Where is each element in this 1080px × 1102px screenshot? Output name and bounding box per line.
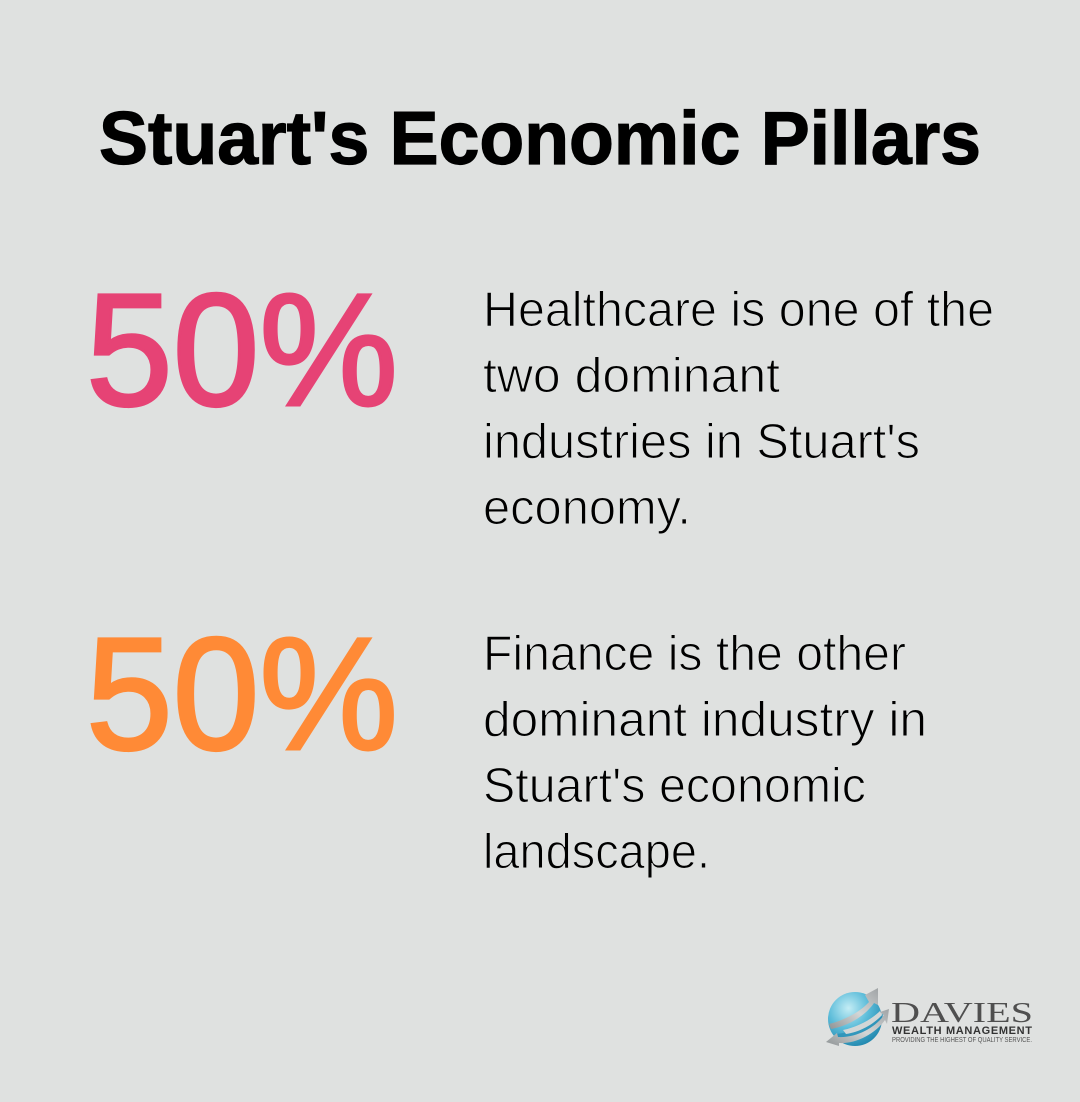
panel: finance stat: [86, 604, 927, 879]
logo tagline: PROVIDING THE HIGHEST OF QUALITY SERVICE.: [892, 1037, 1032, 1044]
logo: Davies Wealth Management: [826, 988, 1033, 1046]
stat: healthcare 50%: 50%: [86, 260, 398, 439]
logo wordmark: DAVIES: [891, 997, 1033, 1029]
text block: healthcare description: two dominant: [483, 349, 780, 403]
text block: finance description: Finance is the other: [483, 627, 906, 681]
text block: healthcare description: [483, 283, 994, 535]
text block: finance description: landscape.: [483, 825, 710, 879]
icon: globe with arrows: [826, 988, 889, 1046]
panel: healthcare stat: [86, 260, 994, 535]
stat: finance 50%: 50%: [86, 604, 398, 783]
title: Stuart's Economic Pillars: [99, 96, 981, 180]
text block: finance description: dominant industry in: [483, 693, 927, 747]
text block: finance description: [483, 627, 927, 879]
text block: healthcare description: industries in Stuart's: [483, 415, 920, 469]
text block: finance description: Stuart's economic: [483, 759, 866, 813]
logo subtitle: WEALTH MANAGEMENT: [892, 1025, 1032, 1037]
text block: healthcare description: Healthcare is one of the: [483, 283, 994, 337]
text block: healthcare description: economy.: [483, 481, 691, 535]
